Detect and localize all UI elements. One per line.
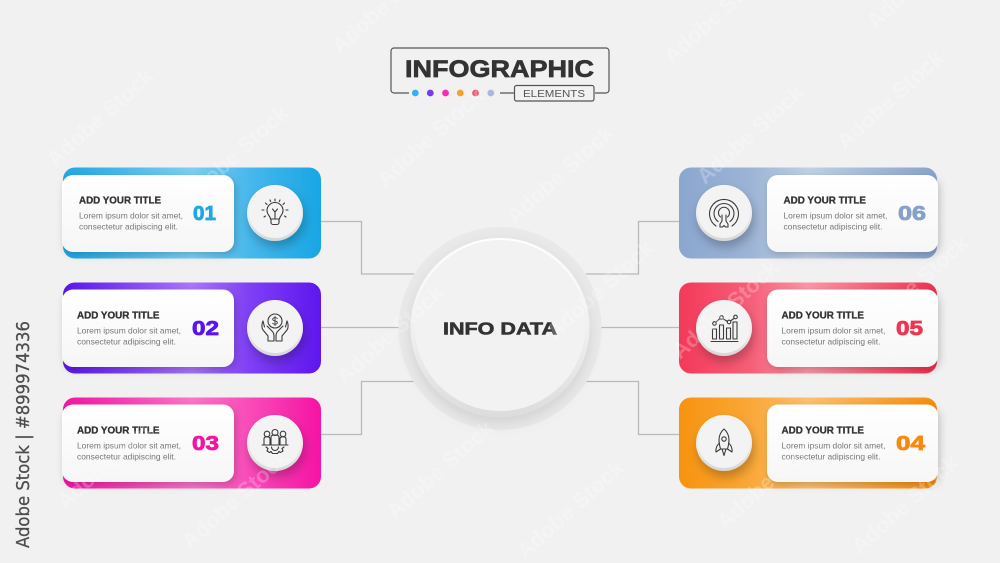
- button 01: [247, 185, 303, 241]
- icon: team with gear: [262, 430, 288, 454]
- body text 06: [784, 211, 888, 231]
- colour dots: [412, 90, 494, 96]
- heading 03: ADD YOUR TITLE: [77, 426, 160, 436]
- watermark pattern: Adobe Stock: [847, 450, 964, 559]
- body text 02: consectetur adipiscing elit.: [77, 337, 176, 346]
- watermark pattern: Adobe Stock: [177, 100, 294, 209]
- body text 03: [77, 441, 181, 461]
- button 03: [247, 415, 303, 471]
- watermark pattern: Adobe Stock: [832, 45, 949, 154]
- body text 03: consectetur adipiscing elit.: [77, 452, 176, 461]
- heading 01: ADD YOUR TITLE: [79, 196, 161, 206]
- body text 01: consectetur adipiscing elit.: [79, 222, 178, 231]
- icon: light bulb: [262, 199, 288, 224]
- stock id label: Adobe Stock | #899974336: [14, 321, 34, 548]
- subtitle box: [514, 86, 594, 101]
- heading 05: ADD YOUR TITLE: [782, 310, 864, 322]
- panel 04: [679, 398, 938, 488]
- heading 04: ADD YOUR TITLE: [782, 426, 864, 436]
- body text 02: Lorem ipsum dolor sit amet,: [77, 326, 181, 335]
- watermark pattern: Adobe Stock: [177, 445, 294, 554]
- watermark pattern: Adobe Stock: [42, 63, 159, 172]
- button 04: [696, 415, 752, 471]
- icon: bar chart with trend: [711, 315, 738, 342]
- panel 03: [62, 398, 321, 488]
- title text: INFOGRAPHIC: [405, 56, 594, 83]
- body text 02: [77, 326, 181, 346]
- watermark pattern: Adobe Stock: [52, 405, 169, 514]
- hub label: INFO DATA: [443, 318, 557, 338]
- watermark pattern: Adobe Stock: [512, 455, 629, 563]
- number 05: 05: [896, 317, 923, 340]
- watermark pattern: Adobe Stock: [502, 120, 619, 229]
- panel 01: [62, 168, 321, 258]
- title block: [391, 48, 609, 101]
- body text 06: consectetur adipiscing elit.: [784, 222, 882, 231]
- watermark pattern: Adobe Stock: [382, 415, 499, 524]
- watermark pattern: Adobe Stock: [712, 425, 829, 534]
- watermark pattern: Adobe Stock: [542, 235, 659, 344]
- number 04: 04: [896, 432, 926, 455]
- number 01: 01: [193, 202, 216, 225]
- body text 05: consectetur adipiscing elit.: [782, 337, 880, 346]
- heading 06: ADD YOUR TITLE: [784, 196, 866, 206]
- watermark pattern: Adobe Stock: [667, 255, 784, 364]
- body text 06: Lorem ipsum dolor sit amet,: [784, 211, 888, 220]
- connector lines: [321, 222, 679, 434]
- panel 06: [679, 168, 938, 258]
- subtitle box: ELEMENTS: [523, 89, 585, 100]
- icon: hands holding coin: [262, 314, 288, 341]
- panel 05: [679, 282, 938, 374]
- body text 05: Lorem ipsum dolor sit amet,: [782, 326, 886, 335]
- body text 04: [782, 441, 886, 461]
- central hub: [398, 227, 602, 430]
- watermark pattern: Adobe Stock: [857, 230, 974, 339]
- number 03: 03: [192, 432, 219, 455]
- number 02: 02: [192, 317, 219, 340]
- number 06: 06: [898, 202, 926, 225]
- body text 04: Lorem ipsum dolor sit amet,: [782, 441, 886, 450]
- button 02: [247, 300, 303, 356]
- icon: signal target: [710, 199, 739, 227]
- watermark pattern: Adobe Stock: [692, 80, 809, 189]
- body text 05: [782, 326, 886, 346]
- heading 02: ADD YOUR TITLE: [77, 310, 160, 322]
- watermark pattern: Adobe Stock: [372, 83, 489, 192]
- panel 02: [62, 282, 321, 374]
- button 05: [696, 300, 752, 356]
- watermark pattern: Adobe Stock: [332, 280, 449, 389]
- body text 01: [79, 211, 183, 231]
- body text 04: consectetur adipiscing elit.: [782, 452, 880, 461]
- body text 03: Lorem ipsum dolor sit amet,: [77, 441, 181, 450]
- icon: rocket: [716, 429, 732, 456]
- body text 01: Lorem ipsum dolor sit amet,: [79, 211, 183, 220]
- button 06: [696, 185, 752, 241]
